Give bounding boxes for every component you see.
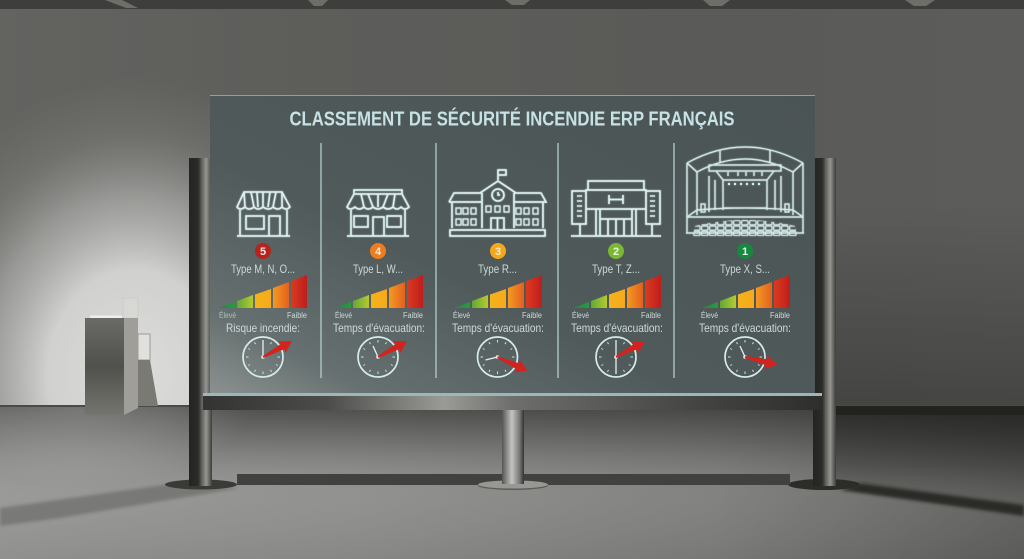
icon: school bbox=[449, 170, 546, 236]
risk gauge: Élevé bbox=[572, 311, 589, 320]
clock bbox=[725, 337, 779, 377]
gauge caption: Temps d'évacuation: bbox=[571, 321, 663, 335]
risk gauge bbox=[701, 275, 790, 320]
icon: shop bbox=[347, 190, 409, 236]
badge 4: 4 bbox=[375, 246, 382, 258]
badge 1: 1 bbox=[742, 246, 748, 258]
icon: hotel bbox=[571, 181, 661, 236]
clock bbox=[243, 335, 295, 377]
type label: Type X, S... bbox=[720, 262, 770, 276]
icon: theatre seats bbox=[693, 220, 797, 236]
icon: theatre bbox=[686, 147, 804, 233]
risk gauge bbox=[572, 275, 661, 320]
pedestal bbox=[85, 298, 158, 415]
badge 2 bbox=[608, 243, 624, 259]
risk gauge: Élevé bbox=[335, 311, 352, 320]
badge 4 bbox=[370, 243, 386, 259]
column: level 5 bbox=[219, 192, 307, 377]
risk gauge: Élevé bbox=[453, 311, 470, 320]
risk gauge: Faible bbox=[522, 311, 542, 320]
badge 5 bbox=[255, 243, 271, 259]
risk gauge bbox=[453, 275, 542, 320]
risk gauge: Faible bbox=[403, 311, 423, 320]
gauge caption: Temps d'évacuation: bbox=[699, 321, 791, 335]
clock bbox=[478, 337, 530, 377]
type label: Type R... bbox=[478, 262, 517, 276]
type label: Type L, W... bbox=[353, 262, 403, 276]
clock bbox=[358, 335, 410, 377]
column: level 4 bbox=[333, 190, 425, 377]
risk gauge bbox=[335, 275, 423, 320]
risk gauge: Faible bbox=[770, 311, 790, 320]
risk gauge: Élevé bbox=[701, 311, 718, 320]
type label: Type M, N, O... bbox=[231, 262, 295, 276]
badge 1 bbox=[737, 243, 753, 259]
icon: small shop bbox=[237, 192, 290, 236]
column: level 1 bbox=[686, 147, 804, 377]
risk gauge: Faible bbox=[641, 311, 661, 320]
gauge caption: Risque incendie: bbox=[226, 321, 300, 335]
badge 2: 2 bbox=[613, 246, 619, 258]
clock bbox=[596, 335, 648, 377]
column: level 2 bbox=[571, 181, 663, 377]
glass panel bbox=[203, 95, 822, 410]
risk gauge: Faible bbox=[287, 311, 307, 320]
risk gauge: Élevé bbox=[219, 311, 236, 320]
badge 3: 3 bbox=[495, 246, 501, 258]
stand: posts, rail and bases bbox=[165, 158, 860, 490]
title: CLASSEMENT DE SÉCURITÉ INCENDIE ERP FRANÇAIS bbox=[290, 108, 734, 130]
badge 3 bbox=[490, 243, 506, 259]
gauge caption: Temps d'évacuation: bbox=[452, 321, 544, 335]
type label: Type T, Z... bbox=[592, 262, 640, 276]
badge 5: 5 bbox=[260, 246, 266, 258]
column: level 3 bbox=[449, 170, 546, 377]
column dividers bbox=[321, 143, 674, 378]
gauge caption: Temps d'évacuation: bbox=[333, 321, 425, 335]
risk gauge bbox=[219, 275, 307, 320]
